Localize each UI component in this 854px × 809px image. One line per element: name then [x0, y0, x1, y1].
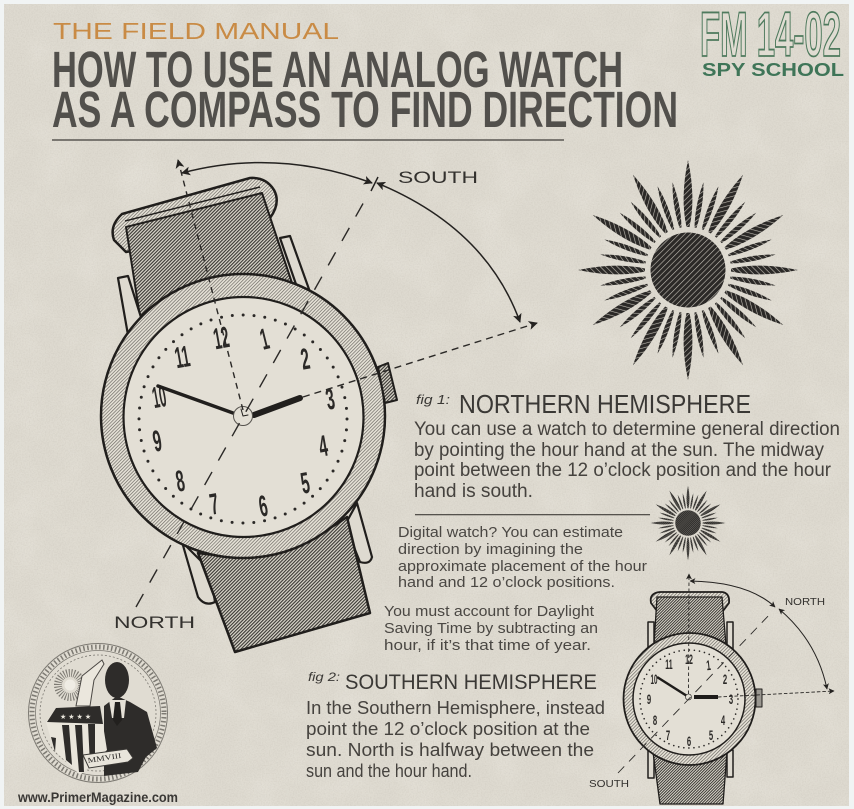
fig 1 heading: NORTHERN HEMISPHERE — [459, 389, 751, 419]
small watch hands — [657, 677, 718, 700]
watch case — [101, 274, 385, 558]
fig 1 heading: fig 1: — [416, 392, 450, 407]
label: south: SOUTH — [398, 168, 478, 187]
arc arrows — [182, 163, 520, 322]
illustration: large watch (northern hemisphere) — [101, 178, 397, 652]
small lugs — [648, 622, 733, 778]
illustration: large sun — [578, 160, 798, 380]
digital watch note: direction by imagining the — [398, 541, 583, 558]
small dial numbers: 6 — [687, 735, 691, 750]
section rule — [415, 514, 650, 515]
fig 1 text: You can use a watch to determine general direction — [414, 419, 840, 440]
small dial numbers: 8 — [653, 714, 657, 729]
dashed direction lines — [136, 160, 537, 607]
dial numbers — [150, 320, 337, 524]
bottom lugs — [182, 503, 372, 604]
small dial numbers: 2 — [723, 673, 727, 688]
fig 2 text — [306, 698, 605, 781]
daylight saving note: You must account for Daylight — [384, 603, 595, 620]
dial numbers: 4 — [317, 430, 331, 464]
small dial — [633, 643, 745, 755]
seal figure — [104, 662, 157, 776]
small dial numbers: 1 — [706, 659, 712, 674]
dial numbers: 12 — [211, 320, 232, 356]
series label: the field manual: THE FIELD MANUAL — [53, 18, 339, 44]
small dial numbers: 4 — [721, 714, 726, 729]
digital watch note: hand and 12 o’clock positions. — [398, 574, 615, 591]
seal sun — [58, 673, 82, 697]
small strap loop — [651, 592, 729, 611]
small top strap — [654, 597, 726, 645]
small dial numbers — [647, 653, 733, 750]
dial — [124, 297, 364, 537]
fig 2 text: sun and the hour hand. — [306, 761, 472, 781]
minute dots — [139, 315, 347, 523]
dial numbers: 1 — [257, 322, 272, 356]
bottom strap — [198, 517, 370, 652]
fig 2 heading: fig 2: — [308, 670, 340, 684]
crown — [378, 363, 397, 403]
dial numbers: 8 — [174, 465, 187, 499]
small dial numbers: 9 — [647, 693, 651, 708]
seal: primer magazine emblem — [28, 644, 168, 782]
small dial numbers: 11 — [665, 658, 673, 673]
digital watch note — [398, 524, 647, 591]
daylight saving note — [384, 603, 598, 654]
fig 2 text: point the 12 o’clock position at the — [306, 719, 590, 739]
seal shield with stripes: ★★★★ — [60, 713, 93, 721]
small arc arrows — [690, 581, 827, 689]
website url: www.PrimerMagazine.com — [17, 790, 178, 805]
digital watch note: Digital watch? You can estimate — [398, 524, 623, 541]
small bottom strap — [653, 752, 727, 804]
dial numbers: 5 — [299, 467, 312, 501]
fig 1 text: hand is south. — [414, 481, 533, 502]
small dial numbers: 3 — [729, 693, 733, 708]
fig 1 text — [414, 419, 840, 502]
label: north: NORTH — [114, 613, 195, 632]
dial numbers: 7 — [208, 488, 221, 522]
title — [52, 41, 678, 138]
small dial numbers: 12 — [685, 653, 693, 668]
fig 2 text: In the Southern Hemisphere, instead — [306, 698, 605, 718]
seal rope border — [28, 644, 168, 782]
dial numbers: 3 — [324, 383, 337, 417]
dial numbers: 6 — [257, 490, 270, 524]
top strap — [126, 193, 292, 317]
small dial numbers: 5 — [709, 729, 713, 744]
seal ribbon: MMVIII — [87, 751, 123, 765]
dial numbers: 2 — [299, 343, 312, 377]
small dial numbers: 7 — [666, 729, 670, 744]
badge: FM 14-02 spy school: SPY SCHOOL — [702, 60, 844, 80]
top lugs — [118, 236, 310, 335]
daylight saving note: Saving Time by subtracting an — [384, 620, 598, 637]
small label: north: NORTH — [785, 597, 825, 608]
top strap loop — [113, 178, 277, 252]
small minute dots — [640, 650, 738, 748]
daylight saving note: hour, if it’s that time of year. — [384, 637, 591, 654]
title rule — [52, 139, 564, 141]
digital watch note: approximate placement of the hour — [398, 558, 647, 575]
illustration: small sun — [651, 486, 725, 560]
small dial numbers: 10 — [650, 672, 658, 688]
fig 1 text: by pointing the hour hand at the sun. The midway — [414, 440, 824, 461]
dial numbers: 9 — [151, 425, 164, 459]
watch hands — [158, 386, 300, 426]
small case — [624, 633, 756, 765]
fig 2 text: sun. North is halfway between the — [306, 740, 594, 760]
small dashed direction lines — [618, 574, 834, 773]
seal saluting arm — [76, 660, 104, 706]
dial numbers: 11 — [172, 339, 192, 375]
illustration: small watch (southern hemisphere) — [624, 592, 762, 804]
small crown — [756, 689, 762, 707]
small label: south: SOUTH — [589, 779, 629, 790]
fig 2 heading: SOUTHERN HEMISPHERE — [345, 671, 597, 694]
dial numbers: 10 — [150, 379, 169, 415]
fig 1 text: point between the 12 o’clock position and the hour — [414, 460, 832, 481]
